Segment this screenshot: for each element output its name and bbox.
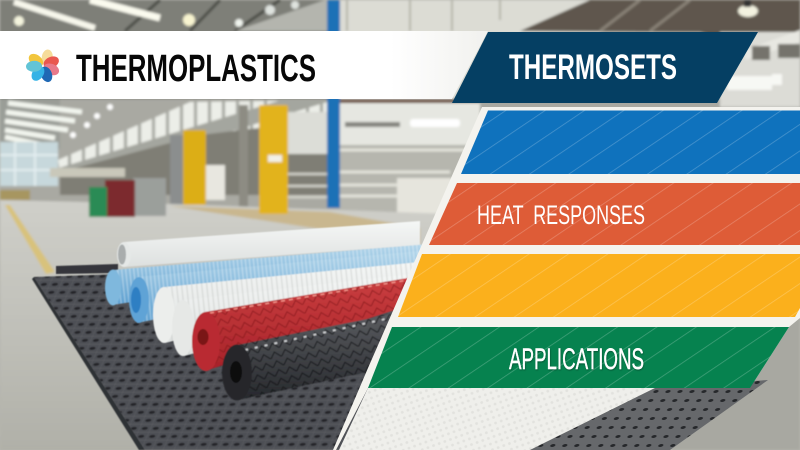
label: applications: APPLICATIONS bbox=[509, 343, 644, 376]
floor bbox=[0, 200, 480, 450]
white backing bbox=[333, 107, 800, 450]
dark mat lower right bbox=[530, 380, 768, 450]
title bar: thermoplastics bbox=[0, 31, 488, 99]
icon: pinwheel logo bbox=[26, 49, 61, 84]
black roll bbox=[222, 314, 392, 400]
heading: thermoplastics: THERMOPLASTICS bbox=[76, 48, 316, 90]
black mat with diamond texture bbox=[32, 264, 420, 450]
coloured boxes bbox=[89, 178, 166, 217]
title banner: thermosets bbox=[452, 32, 758, 103]
band: blue bbox=[461, 110, 800, 174]
ceiling bbox=[0, 0, 800, 100]
right floor bbox=[671, 318, 800, 450]
blue ribbed roll front bbox=[129, 250, 430, 323]
band: yellow bbox=[398, 254, 800, 317]
band: applications bbox=[368, 327, 789, 388]
white ribbed roll front bbox=[172, 301, 194, 357]
heading: thermosets: THERMOSETS bbox=[509, 48, 677, 87]
blue column bbox=[327, 0, 340, 208]
white plain roll bbox=[117, 221, 420, 267]
mid hall bbox=[0, 30, 800, 228]
white textured mat bbox=[339, 388, 655, 450]
white ribbed roll back bbox=[153, 261, 430, 343]
band: heat responses bbox=[429, 183, 800, 245]
right panel of stacked bands bbox=[333, 107, 800, 450]
red roll bbox=[192, 276, 420, 371]
product rolls bbox=[105, 221, 430, 400]
yellow pillars bbox=[183, 105, 288, 214]
floor line bbox=[5, 205, 55, 274]
blue ribbed roll back bbox=[105, 244, 430, 306]
label: heat responses: HEAT RESPONSES bbox=[477, 200, 645, 230]
